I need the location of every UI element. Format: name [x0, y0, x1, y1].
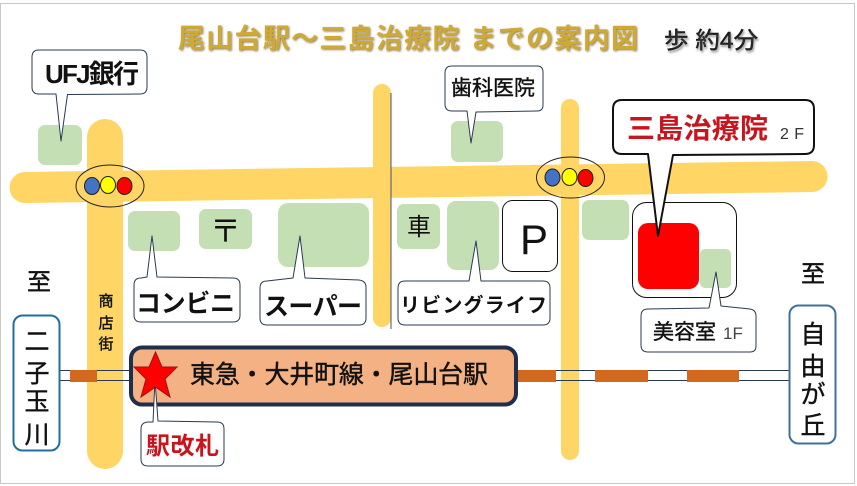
direction label: Futako-Tamagawa: 川: [24, 421, 50, 449]
callout: UFJ bank: UFJ銀行: [45, 59, 139, 89]
callout: Mishima clinic: [613, 100, 814, 236]
callout: Mishima clinic: 三島治療院: [627, 113, 768, 144]
callout: UFJ bank: [32, 50, 147, 141]
callout: Mishima clinic: 2 F: [780, 126, 804, 143]
callout: convenience store: [134, 236, 240, 322]
building blocks: [38, 121, 629, 270]
direction label: Futako-Tamagawa: 玉: [24, 388, 50, 416]
callout: convenience store: コンビニ: [136, 290, 235, 318]
callout: Living Life store: [398, 241, 550, 325]
callout: beauty salon: 美容室: [653, 321, 716, 344]
post office mark: 〒: [210, 214, 241, 249]
direction label: Jiyugaoka: 丘: [800, 412, 826, 440]
callout: Living Life store: リビングライフ: [400, 293, 547, 317]
callout: station ticket gate: 駅改札: [146, 433, 219, 460]
direction label: Futako-Tamagawa: 至: [27, 269, 51, 296]
label: shopping street: 商: [98, 293, 114, 310]
icon: station star: [134, 352, 177, 397]
direction label: Futako-Tamagawa: 子: [24, 360, 50, 388]
label: shopping street: 街: [98, 336, 114, 353]
callout: beauty salon: [641, 272, 756, 352]
callout: beauty salon: 1F: [723, 324, 743, 343]
direction label: Jiyugaoka: 由: [800, 353, 826, 381]
traffic signal right: [536, 157, 604, 198]
direction label: Jiyugaoka: 自: [800, 321, 826, 349]
direction label: Jiyugaoka: が: [800, 381, 826, 409]
railway line: [60, 370, 790, 382]
direction label: Futako-Tamagawa: [14, 269, 60, 450]
clinic building: [632, 202, 736, 298]
title: 尾山台駅～三島治療院 までの案内図: [178, 24, 638, 54]
parking lot mark: 車: [407, 214, 431, 241]
station box: 東急・大井町線・尾山台駅: [190, 361, 488, 389]
direction label: Jiyugaoka: [790, 261, 836, 444]
walking time: 歩 約4分: [664, 27, 758, 53]
callout: supermarket: スーパー: [264, 293, 362, 321]
direction label: Futako-Tamagawa: 二: [24, 328, 50, 356]
label: shopping street: 店: [98, 315, 114, 332]
traffic signal left: [76, 165, 144, 207]
parking box: [502, 200, 558, 272]
roads: [25, 93, 812, 451]
callout: dental clinic: [445, 66, 543, 143]
parking box: P: [520, 216, 548, 263]
direction label: Jiyugaoka: 至: [801, 261, 825, 288]
callout: station ticket gate: [141, 380, 224, 466]
label: shopping street: [98, 293, 114, 353]
callout: dental clinic: 歯科医院: [451, 77, 535, 100]
station box: [131, 348, 516, 404]
callout: supermarket: [260, 236, 366, 325]
